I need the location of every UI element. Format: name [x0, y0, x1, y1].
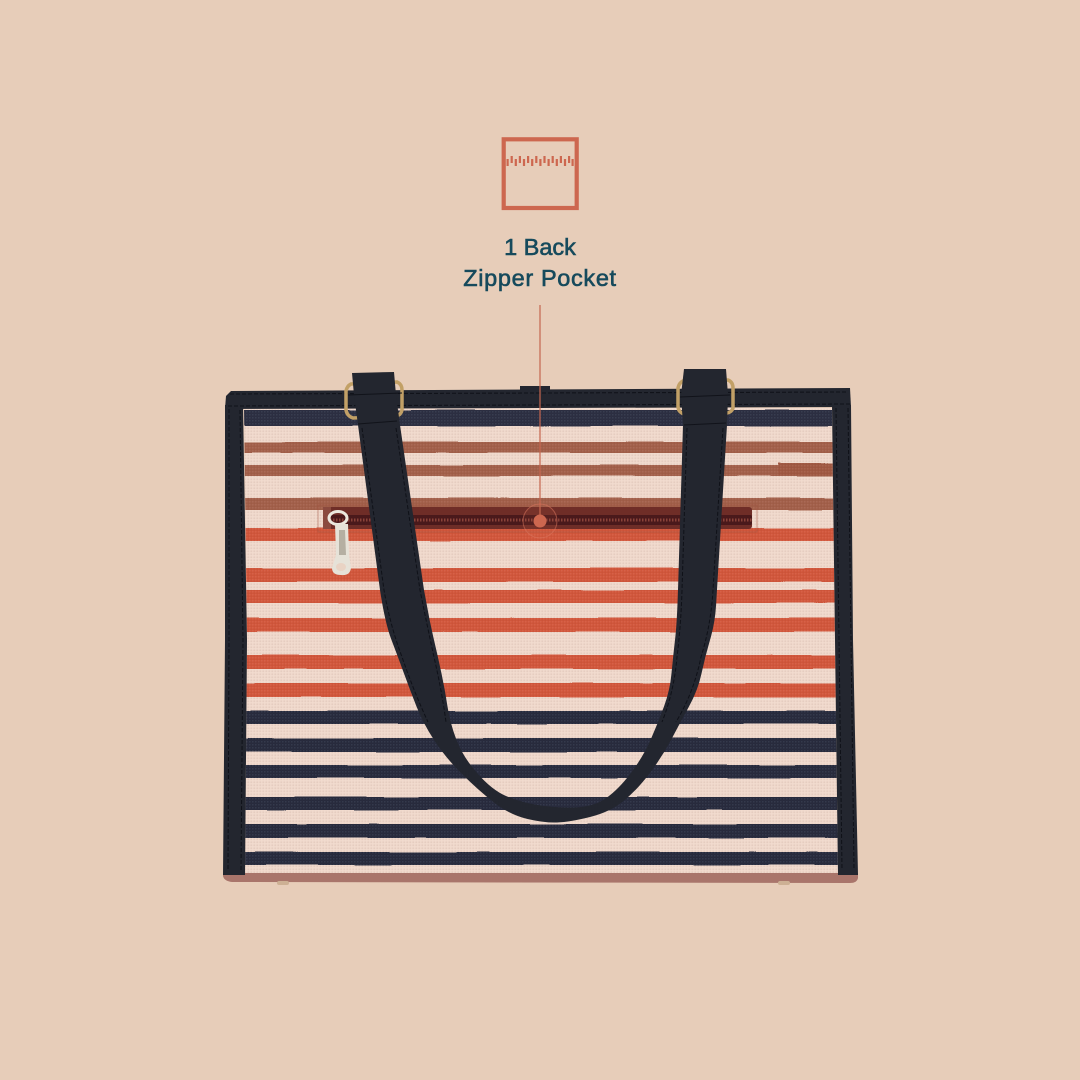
tote bag, back view [223, 369, 858, 885]
bag base trim [223, 873, 858, 883]
right strap buckle [678, 380, 733, 414]
continuous U-shaped strap [358, 425, 727, 823]
zipper pull [329, 512, 351, 575]
callout leader line with marker [523, 305, 557, 538]
shoulder straps [348, 369, 730, 823]
frame stitching [228, 392, 854, 870]
heading: 1 Back Zipper Pocket [463, 234, 617, 291]
icon: back pocket with zipper stitches [504, 139, 577, 208]
leather frame [223, 386, 858, 875]
left strap keeper loop [352, 372, 400, 425]
left strap buckle [346, 382, 402, 418]
fabric panel with printed stripes [236, 405, 846, 877]
heading: 1 Back Zipper Pocket: Zipper Pocket [463, 265, 617, 291]
strap stitching [362, 428, 723, 722]
heading: 1 Back Zipper Pocket: 1 Back [504, 234, 576, 260]
right strap keeper loop [681, 369, 728, 425]
base feet [277, 881, 790, 885]
back zipper pocket [318, 505, 757, 532]
